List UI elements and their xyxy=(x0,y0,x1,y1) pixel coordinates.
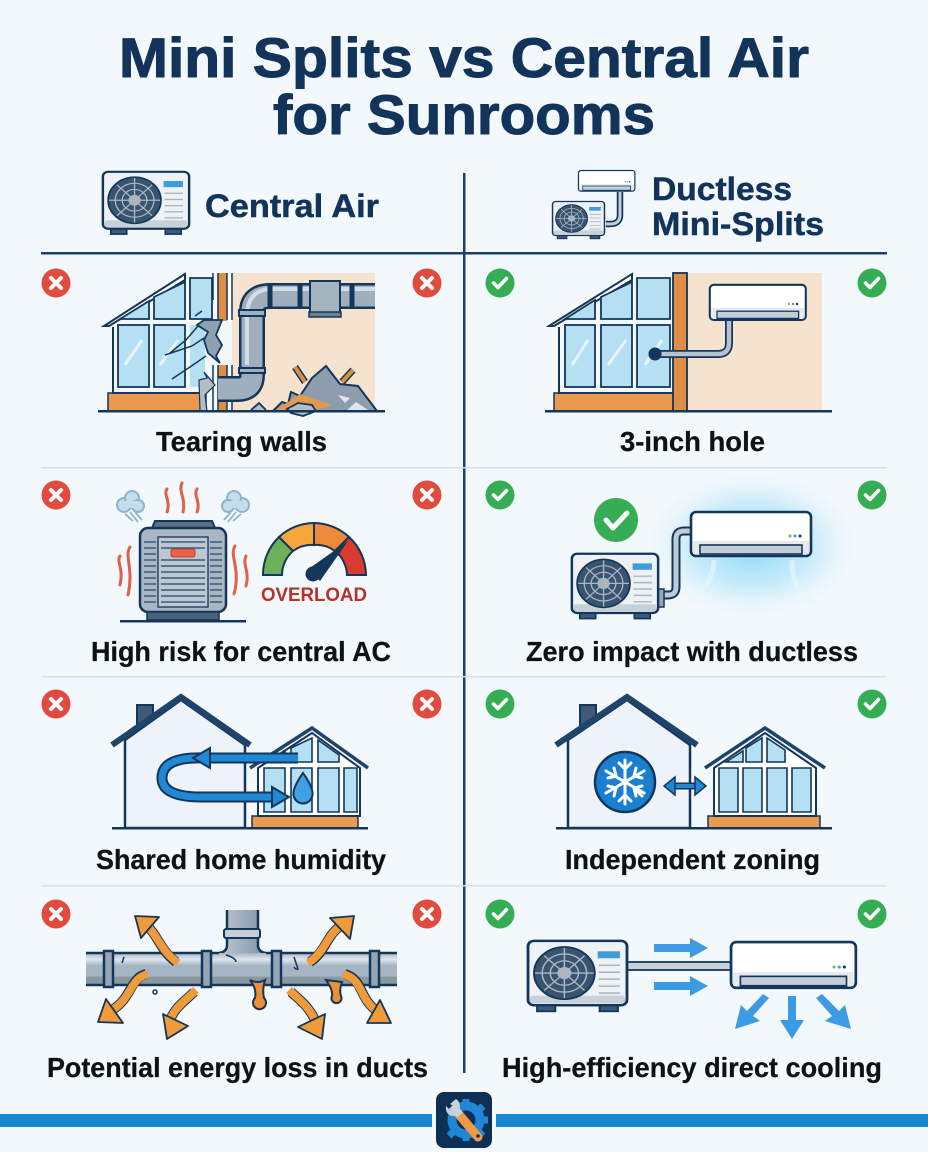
panel: Independent zoning xyxy=(486,690,886,875)
label: High risk for central AC: High risk for central AC xyxy=(91,636,391,667)
icon: independent zones xyxy=(556,697,832,830)
badge: check right xyxy=(858,690,886,718)
vertical column divider xyxy=(463,173,466,1073)
label: Potential energy loss in ducts: Potential energy loss in ducts xyxy=(47,1052,428,1083)
label: Zero impact with ductless: Zero impact with ductless xyxy=(526,636,858,667)
badge: check left xyxy=(486,268,514,298)
column header: Central Air xyxy=(103,172,379,234)
badge: check right xyxy=(858,900,886,928)
title xyxy=(119,26,809,146)
icon: overload gauge xyxy=(261,523,367,606)
icon: shared air loop with humidity xyxy=(112,697,368,830)
heading: Ductless Mini-Splits: Ductless xyxy=(652,171,792,207)
badge: cross left xyxy=(42,268,70,298)
badge: cross left xyxy=(42,900,70,928)
label: High-efficiency direct cooling: High-efficiency direct cooling xyxy=(502,1052,882,1083)
badge: cross left xyxy=(42,690,70,718)
panel: High risk for central AC xyxy=(42,480,442,667)
badge: cross left xyxy=(42,480,70,510)
badge: cross right xyxy=(412,900,442,928)
icon: direct cooling system xyxy=(528,938,856,1039)
title: for Sunrooms xyxy=(273,83,655,146)
label: 3-inch hole: 3-inch hole xyxy=(620,426,765,457)
heading: Central Air: Central Air xyxy=(205,188,379,224)
text: OVERLOAD: OVERLOAD xyxy=(261,585,367,606)
icon: large check xyxy=(594,498,638,542)
icon: mini-split units xyxy=(553,170,635,239)
icon: cold airflow glow xyxy=(647,473,857,617)
badge: cross right xyxy=(412,690,442,718)
label: Independent zoning: Independent zoning xyxy=(565,844,820,875)
icon: overheating condenser xyxy=(117,483,249,622)
badge: check right xyxy=(858,268,886,298)
icon: torn sunroom wall with duct xyxy=(98,273,385,416)
badge: cross right xyxy=(412,480,442,510)
panel: Zero impact with ductless xyxy=(486,473,886,667)
badge: check left xyxy=(486,480,514,510)
panel: 3-inch hole xyxy=(486,268,886,457)
panel: Potential energy loss in ducts xyxy=(42,900,442,1083)
panel: High-efficiency direct cooling xyxy=(486,900,886,1083)
column header: Ductless Mini-Splits xyxy=(553,170,824,242)
badge: cross right xyxy=(412,268,442,298)
label: Shared home humidity: Shared home humidity xyxy=(96,844,386,875)
icon: sunroom with small hole and indoor unit xyxy=(545,273,832,412)
icon: footer logo wrench and gear xyxy=(436,1092,492,1148)
panel: Shared home humidity xyxy=(42,690,442,875)
icon: leaking ducts xyxy=(86,910,397,1039)
title: Mini Splits vs Central Air xyxy=(119,26,809,89)
panel: Tearing walls xyxy=(42,268,442,457)
badge: check left xyxy=(486,690,514,718)
badge: check right xyxy=(858,480,886,510)
label: Tearing walls: Tearing walls xyxy=(156,426,327,457)
icon: mini-split system xyxy=(572,512,811,619)
heading: Ductless Mini-Splits: Mini-Splits xyxy=(652,206,824,242)
heading: Ductless Mini-Splits xyxy=(652,171,824,242)
header rule xyxy=(41,252,887,254)
badge: check left xyxy=(486,900,514,928)
footer bar right xyxy=(496,1114,928,1127)
footer bar left xyxy=(0,1114,432,1127)
icon: central air unit xyxy=(103,172,189,234)
